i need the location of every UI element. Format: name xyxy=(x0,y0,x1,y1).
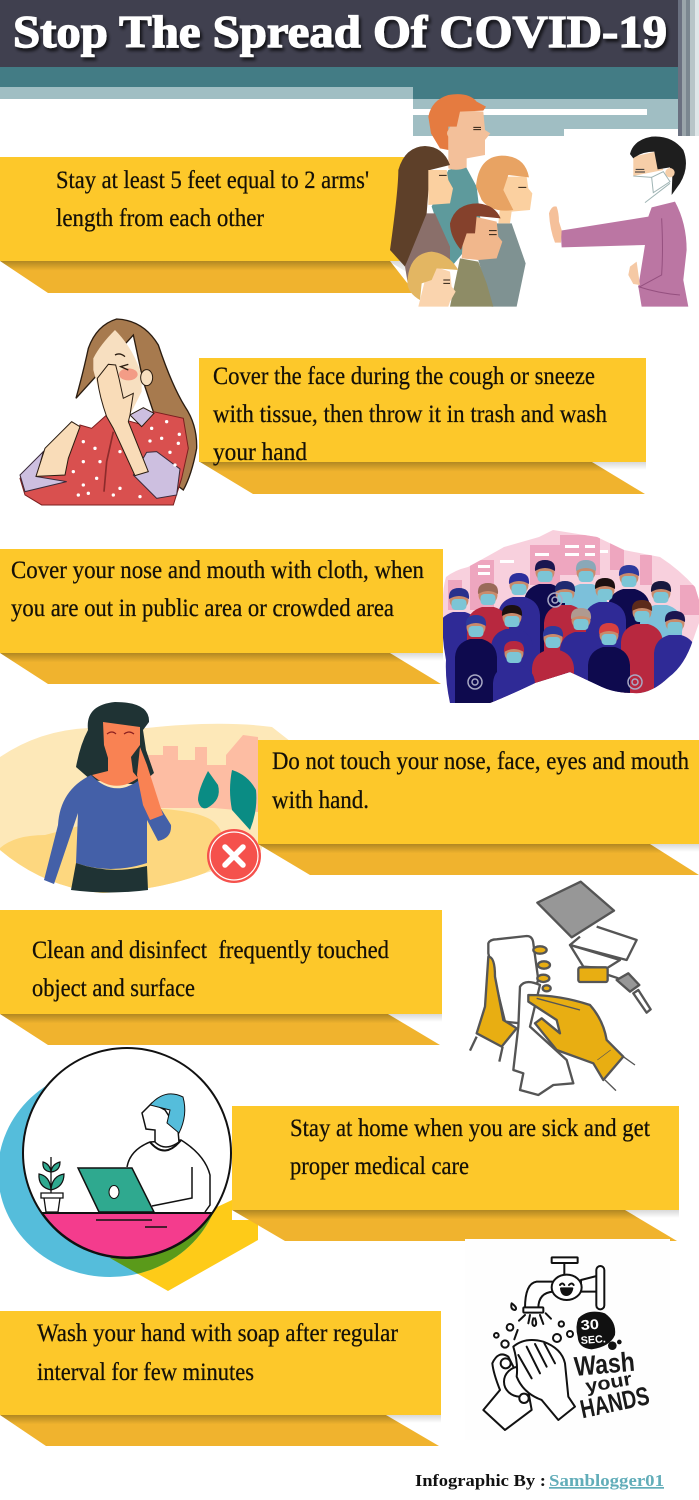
ribbon shadow xyxy=(386,1415,441,1423)
yellow band xyxy=(258,740,699,844)
illustration: wash your hands xyxy=(465,1239,670,1440)
credit line xyxy=(415,1471,664,1490)
ribbon fold xyxy=(0,653,441,684)
text: wash hands: interval for few minutes xyxy=(37,1359,254,1386)
yellow band xyxy=(0,157,410,261)
panel: wash hands xyxy=(0,1311,441,1446)
header banner xyxy=(0,0,699,136)
icon: 30 sec badge: 30 xyxy=(580,1316,600,1333)
ribbon fold xyxy=(200,462,645,494)
text: do not touch xyxy=(272,748,689,814)
text: stay at home: Stay at home when you are sick and get xyxy=(290,1115,650,1142)
text: cover face: with tissue, then throw it in trash and wash xyxy=(213,401,607,428)
yellow band xyxy=(0,1311,441,1415)
panel: keep distance xyxy=(0,157,415,293)
text: clean and disinfect: object and surface xyxy=(32,975,195,1002)
yellow band xyxy=(0,549,443,653)
illustration: people keeping distance xyxy=(390,94,688,307)
illustration: woman touching face xyxy=(0,702,295,893)
ribbon fold xyxy=(0,261,415,293)
text: cover nose and mouth xyxy=(11,557,424,622)
ribbon fold xyxy=(232,1210,677,1241)
yellow band xyxy=(0,910,442,1014)
text: cover face xyxy=(213,363,607,466)
text: clean and disinfect: Clean and disinfect frequently touched xyxy=(32,937,389,964)
text: keep distance: Stay at least 5 feet equal to 2 arms' xyxy=(56,167,369,194)
ribbon shadow xyxy=(650,844,699,852)
panel: cover nose and mouth xyxy=(0,549,443,684)
icon: 30 sec badge: SEC. xyxy=(580,1333,606,1347)
ribbon fold xyxy=(0,1014,440,1045)
lettering: wash your hands: Wash xyxy=(573,1346,636,1382)
illustration: person at laptop xyxy=(0,1048,258,1291)
yellow band xyxy=(232,1106,679,1210)
text: keep distance xyxy=(56,167,369,232)
text: cover face: your hand xyxy=(213,439,307,466)
icon: red cross circle xyxy=(207,829,261,883)
ribbon shadow xyxy=(388,261,412,275)
text: cover nose and mouth: you are out in public area or crowded area xyxy=(11,595,394,622)
lettering: wash your hands: your xyxy=(584,1368,633,1397)
text: keep distance: length from each other xyxy=(56,205,265,232)
illustration: gloved hands cleaning phone xyxy=(470,882,651,1095)
text: cover nose and mouth: Cover your nose and mouth with cloth, when xyxy=(11,557,424,584)
illustration: sneezing woman xyxy=(20,319,197,505)
yellow band xyxy=(199,358,646,462)
panel: cover face xyxy=(199,358,646,494)
icon: 30 sec badge xyxy=(576,1312,622,1350)
ribbon shadow xyxy=(625,1210,679,1218)
credit line: Infographic By : xyxy=(415,1471,546,1490)
lettering: wash your hands: HANDS xyxy=(577,1380,652,1424)
text: stay at home: proper medical care xyxy=(290,1153,469,1180)
ribbon fold xyxy=(0,1415,439,1446)
ribbon shadow xyxy=(390,653,443,661)
text: clean and disinfect xyxy=(32,937,389,1002)
text: cover face: Cover the face during the cough or sneeze xyxy=(213,363,595,390)
ribbon shadow xyxy=(388,1014,442,1022)
text: do not touch: with hand. xyxy=(272,787,369,814)
text: wash hands xyxy=(37,1320,399,1386)
panel: clean and disinfect xyxy=(0,910,442,1045)
lettering: wash your hands xyxy=(573,1346,652,1424)
panel: do not touch xyxy=(258,740,699,875)
title: Stop The Spread Of COVID-19 xyxy=(13,6,667,57)
ribbon shadow xyxy=(592,462,646,470)
credit line: Samblogger01 xyxy=(549,1471,664,1490)
ribbon fold xyxy=(258,844,699,875)
panel: stay at home xyxy=(232,1106,679,1241)
illustration: masked crowd xyxy=(443,530,699,703)
text: stay at home xyxy=(290,1115,650,1180)
text: wash hands: Wash your hand with soap after regular xyxy=(37,1320,399,1347)
